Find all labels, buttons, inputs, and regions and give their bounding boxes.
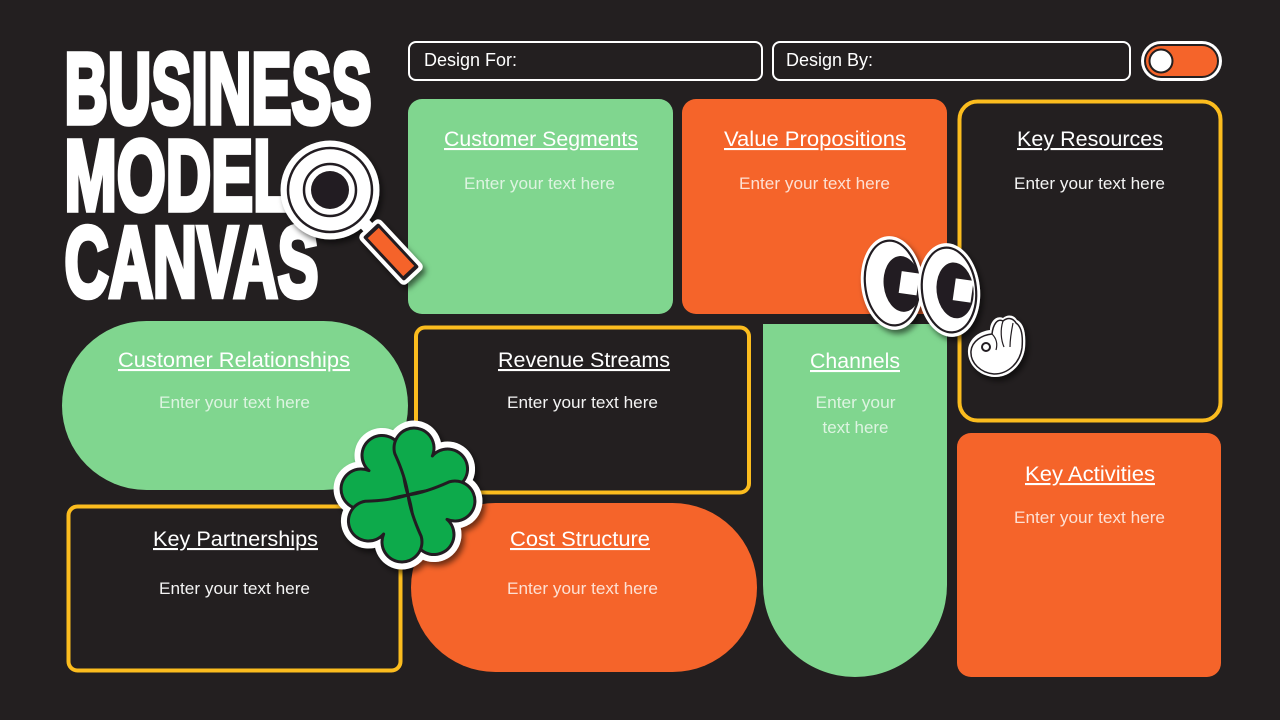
panel: revenue streams bbox=[416, 328, 749, 492]
panel: channels: Channels bbox=[810, 350, 900, 373]
field: design for bbox=[409, 42, 762, 80]
panel: key resources: Enter your text here bbox=[1014, 174, 1165, 193]
field: design by: Design By: bbox=[786, 50, 873, 70]
panel: cost structure bbox=[411, 503, 757, 672]
field: design for: Design For: bbox=[424, 50, 517, 70]
panel: channels bbox=[763, 324, 947, 677]
panel: value propositions bbox=[682, 99, 947, 314]
panel: key activities bbox=[957, 433, 1221, 677]
panel: channels: text here bbox=[822, 418, 888, 437]
panel: cost structure: Cost Structure bbox=[510, 528, 650, 551]
panel: revenue streams: Revenue Streams bbox=[498, 349, 670, 372]
panel: key partnerships: Enter your text here bbox=[159, 579, 310, 598]
panel: customer segments: Enter your text here bbox=[464, 174, 615, 193]
panel: key activities: Enter your text here bbox=[1014, 508, 1165, 527]
title: CANVAS bbox=[64, 206, 318, 318]
icon: magnifying glass bbox=[280, 140, 425, 287]
icon: googly eyes bbox=[856, 233, 985, 340]
panel: key resources bbox=[960, 102, 1220, 420]
panel: key partnerships bbox=[68, 506, 400, 670]
panel: customer segments: Customer Segments bbox=[444, 128, 638, 151]
panel: value propositions: Value Propositions bbox=[724, 128, 906, 151]
panel: customer relationships: Enter your text here bbox=[159, 393, 310, 412]
right eye bbox=[913, 240, 985, 340]
icon: ok hand bbox=[968, 316, 1025, 377]
panel: cost structure: Enter your text here bbox=[507, 579, 658, 598]
panel: key resources: Key Resources bbox=[1017, 128, 1163, 151]
panel: revenue streams: Enter your text here bbox=[507, 393, 658, 412]
left eye bbox=[856, 233, 928, 333]
panel: customer segments bbox=[408, 99, 673, 314]
panel: customer relationships: Customer Relationships bbox=[118, 349, 350, 372]
field: design by bbox=[773, 42, 1130, 80]
toggle switch bbox=[1141, 41, 1222, 81]
panel: key activities: Key Activities bbox=[1025, 463, 1155, 486]
panel: value propositions: Enter your text here bbox=[739, 174, 890, 193]
panel: customer relationships bbox=[62, 321, 408, 490]
title bbox=[64, 33, 372, 318]
title: BUSINESS bbox=[64, 33, 372, 145]
panel: channels: Enter your bbox=[816, 393, 896, 412]
panel: key partnerships: Key Partnerships bbox=[153, 528, 318, 551]
title: MODEL bbox=[64, 120, 292, 232]
icon: four-leaf clover bbox=[333, 420, 483, 570]
